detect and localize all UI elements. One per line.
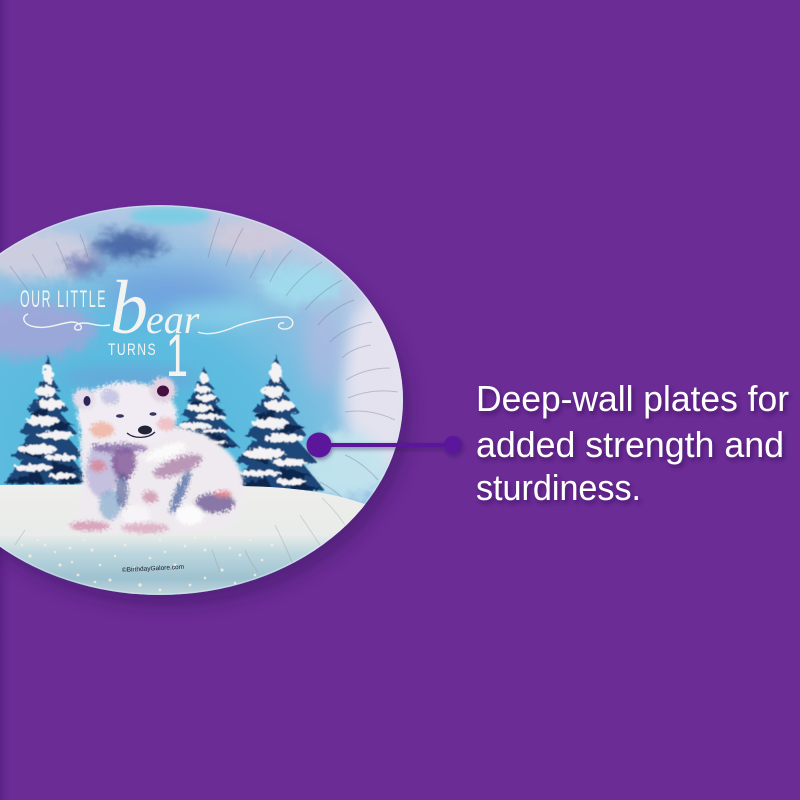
plate rim highlight — [0, 206, 402, 594]
callout text: Deep-wall plates for — [476, 378, 789, 419]
turns: TURNS — [108, 340, 157, 359]
snow ground — [0, 484, 366, 595]
tree right — [227, 353, 325, 492]
trees — [4, 353, 325, 492]
watercolor clouds on rim — [0, 207, 414, 499]
bear body — [68, 425, 244, 533]
tree middle — [168, 367, 240, 448]
callout text — [476, 378, 789, 508]
rim pleats — [10, 218, 398, 500]
swirl right — [198, 317, 293, 334]
plate copyright: ©BirthdayGalore.com — [122, 563, 184, 574]
callout text: added strength and — [476, 424, 784, 465]
plate — [0, 200, 420, 610]
numeral one: 1 — [166, 322, 188, 389]
ground pleats — [15, 498, 345, 572]
callout anchor dot — [306, 432, 332, 458]
callout end dot — [444, 436, 462, 454]
snow specks — [21, 531, 286, 591]
swirl left — [24, 314, 110, 330]
callout text: sturdiness. — [476, 467, 641, 508]
bear head — [73, 377, 177, 453]
tree left — [4, 355, 92, 485]
plate shadow — [0, 217, 411, 607]
polar bear — [68, 377, 244, 533]
our little: OUR LITTLE — [20, 286, 107, 313]
plate sky background — [0, 200, 410, 600]
plate message — [20, 280, 294, 376]
bear script: bear — [110, 266, 200, 350]
callout connector — [306, 432, 462, 458]
